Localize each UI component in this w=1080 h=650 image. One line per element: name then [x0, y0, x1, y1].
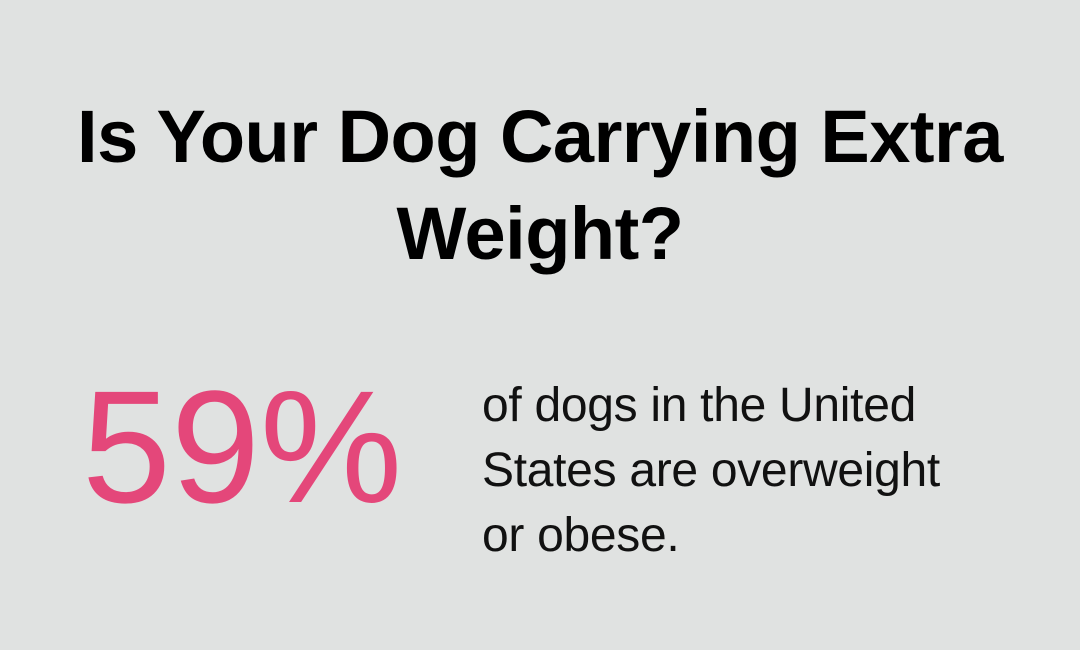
statistic: 59%: 59% [82, 357, 402, 536]
title [77, 95, 1004, 275]
description text: or obese. [482, 509, 679, 562]
title: Is Your Dog Carrying Extra [77, 95, 1003, 178]
description text: States are overweight [482, 444, 940, 497]
description text [482, 379, 940, 562]
title: Weight? [396, 192, 683, 275]
description text: of dogs in the United [482, 379, 916, 432]
